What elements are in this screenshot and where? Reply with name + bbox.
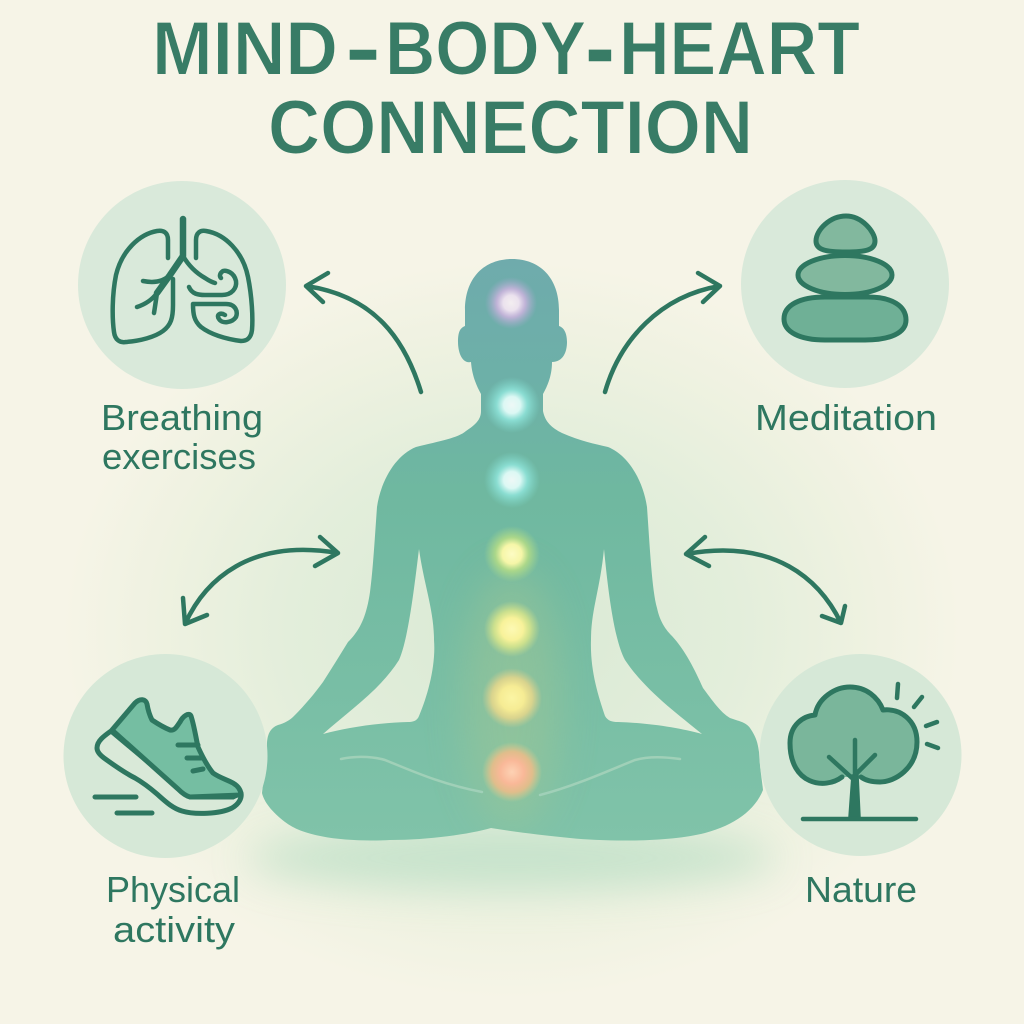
title: HEART bbox=[619, 6, 860, 92]
title bbox=[152, 6, 860, 170]
title: MIND bbox=[152, 6, 338, 92]
warm glow along the spine bbox=[464, 570, 560, 830]
arrow: physical activity two-way bbox=[183, 537, 338, 624]
arrow: to meditation bbox=[605, 273, 720, 392]
title: - bbox=[587, 7, 613, 92]
label: exercises bbox=[102, 436, 256, 477]
label bbox=[101, 397, 263, 477]
background glow bbox=[62, 260, 962, 1000]
panel: nature bbox=[760, 654, 962, 910]
label: Meditation bbox=[755, 397, 937, 438]
arrow: to breathing bbox=[306, 273, 421, 392]
label bbox=[106, 869, 240, 950]
icon: stacked stones bbox=[784, 216, 906, 340]
label: Breathing bbox=[101, 397, 263, 438]
label: Nature bbox=[805, 869, 917, 910]
icon: lungs bbox=[113, 219, 252, 342]
title: CONNECTION bbox=[268, 86, 753, 170]
title: BODY bbox=[385, 6, 586, 92]
chakra points bbox=[482, 277, 542, 802]
title: – bbox=[349, 7, 377, 92]
ground shadow bbox=[247, 826, 777, 890]
icon: running shoe bbox=[95, 700, 241, 813]
panel: physical activity bbox=[64, 654, 268, 950]
label: Physical bbox=[106, 869, 240, 910]
arrow: nature two-way bbox=[686, 537, 845, 623]
meditating figure bbox=[262, 259, 763, 841]
leg crease lines bbox=[341, 757, 680, 795]
label: activity bbox=[113, 909, 235, 950]
icon: tree and sun bbox=[790, 684, 938, 819]
panel: breathing exercises bbox=[78, 181, 286, 477]
panel: meditation bbox=[741, 180, 949, 438]
